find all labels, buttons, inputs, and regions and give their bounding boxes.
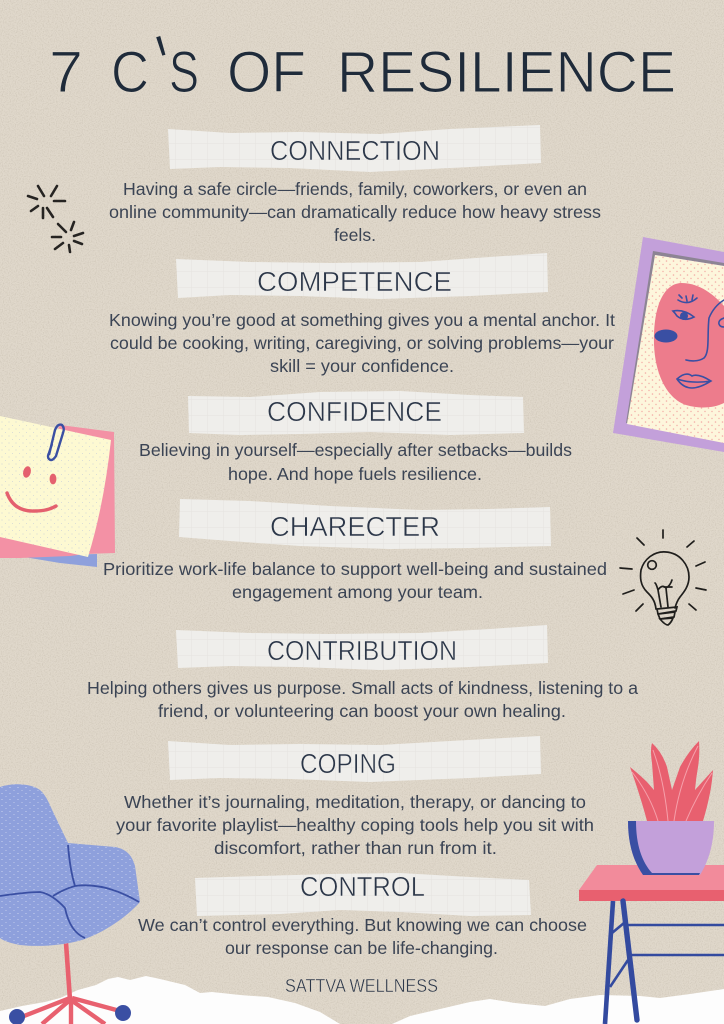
body: connection: online community—can dramatically reduce how heavy stress <box>109 202 601 222</box>
plant leaves <box>630 741 713 821</box>
smiley mouth <box>7 493 56 511</box>
body: contribution: Helping others gives us purpose. Small acts of kindness, listening to a <box>87 678 638 698</box>
title: 7 <box>49 40 83 105</box>
body: confidence <box>139 440 572 484</box>
facial features <box>673 295 724 388</box>
body: contribution <box>87 678 638 721</box>
illustration: blue chair <box>0 784 140 1024</box>
illustration: sticky note with smiley <box>0 416 115 567</box>
section: character <box>103 499 607 602</box>
title: C <box>111 40 149 105</box>
illustration: framed face portrait <box>613 237 724 452</box>
heading: control: CONTROL <box>300 871 425 902</box>
section: coping <box>116 736 594 858</box>
eye pupil <box>680 312 688 320</box>
heading strip: competence <box>176 253 548 299</box>
face <box>654 283 724 407</box>
paperclip <box>48 425 64 460</box>
heading: character: CHARECTER <box>270 511 440 542</box>
body: control: We can’t control everything. But knowing we can choose <box>138 915 587 935</box>
body: coping: your favorite playlist—healthy coping tools help you sit with <box>116 815 594 835</box>
section: confidence <box>139 391 572 484</box>
body: coping: discomfort, rather than run from it. <box>214 838 497 858</box>
heading strip: connection <box>168 125 541 172</box>
heading strip: control <box>195 873 531 916</box>
heading: competence: COMPETENCE <box>257 266 452 297</box>
body: control: our response can be life-changing. <box>225 938 498 958</box>
footer: brand name: SATTVA WELLNESS <box>285 976 438 996</box>
heading: connection: CONNECTION <box>270 135 440 166</box>
section: control <box>138 871 587 958</box>
table front edge <box>579 890 724 901</box>
cheek <box>654 330 678 342</box>
icon: light bulb <box>620 530 706 625</box>
leaf veins <box>632 746 712 821</box>
body: character <box>103 559 607 602</box>
chair base <box>24 943 120 1024</box>
body: coping: Whether it’s journaling, meditation, therapy, or dancing to <box>124 792 586 812</box>
body: confidence: Believing in yourself—especially after setbacks—builds <box>139 440 572 460</box>
heading: confidence: CONFIDENCE <box>267 396 442 427</box>
section: competence <box>109 253 615 376</box>
title <box>49 18 676 116</box>
body: control <box>138 915 587 958</box>
heading strip: character <box>179 499 551 549</box>
section: contribution <box>87 625 638 721</box>
wheels <box>9 1005 131 1024</box>
body: competence: could be cooking, writing, caregiving, or solving problems—your <box>110 333 614 353</box>
table top <box>579 865 724 890</box>
heading strip: confidence <box>188 391 524 435</box>
title: OF <box>227 40 306 105</box>
title: ' <box>149 18 186 116</box>
body: contribution: friend, or volunteering can boost your own healing. <box>158 701 566 721</box>
body: connection: feels. <box>334 225 376 245</box>
pot shadow <box>628 821 700 875</box>
heading strip: contribution <box>176 625 548 670</box>
smiley eyes <box>22 465 32 479</box>
heading: contribution: CONTRIBUTION <box>267 635 457 666</box>
body: confidence: hope. And hope fuels resilience. <box>228 464 482 484</box>
heading: coping: COPING <box>300 748 396 779</box>
body: connection <box>109 179 601 245</box>
title: RESILIENCE <box>337 40 676 105</box>
torn white paper bottom edge <box>0 976 724 1024</box>
body: character: Prioritize work-life balance to support well-being and sustained <box>103 559 607 579</box>
body: character: engagement among your team. <box>232 582 483 602</box>
chair shell <box>0 784 140 946</box>
table legs <box>605 901 724 1024</box>
body: competence <box>109 310 615 376</box>
body: competence: skill = your confidence. <box>270 356 454 376</box>
chair seams <box>0 845 139 938</box>
body: competence: Knowing you’re good at something gives you a mental anchor. It <box>109 310 615 330</box>
illustration: plant on table <box>579 741 724 1024</box>
body: connection: Having a safe circle—friends, family, coworkers, or even an <box>123 179 587 199</box>
icon: sparks <box>28 186 83 252</box>
body: coping <box>116 792 594 858</box>
title: S <box>169 40 199 105</box>
pot <box>628 821 714 875</box>
heading strip: coping <box>168 736 541 782</box>
section: connection <box>109 125 601 245</box>
